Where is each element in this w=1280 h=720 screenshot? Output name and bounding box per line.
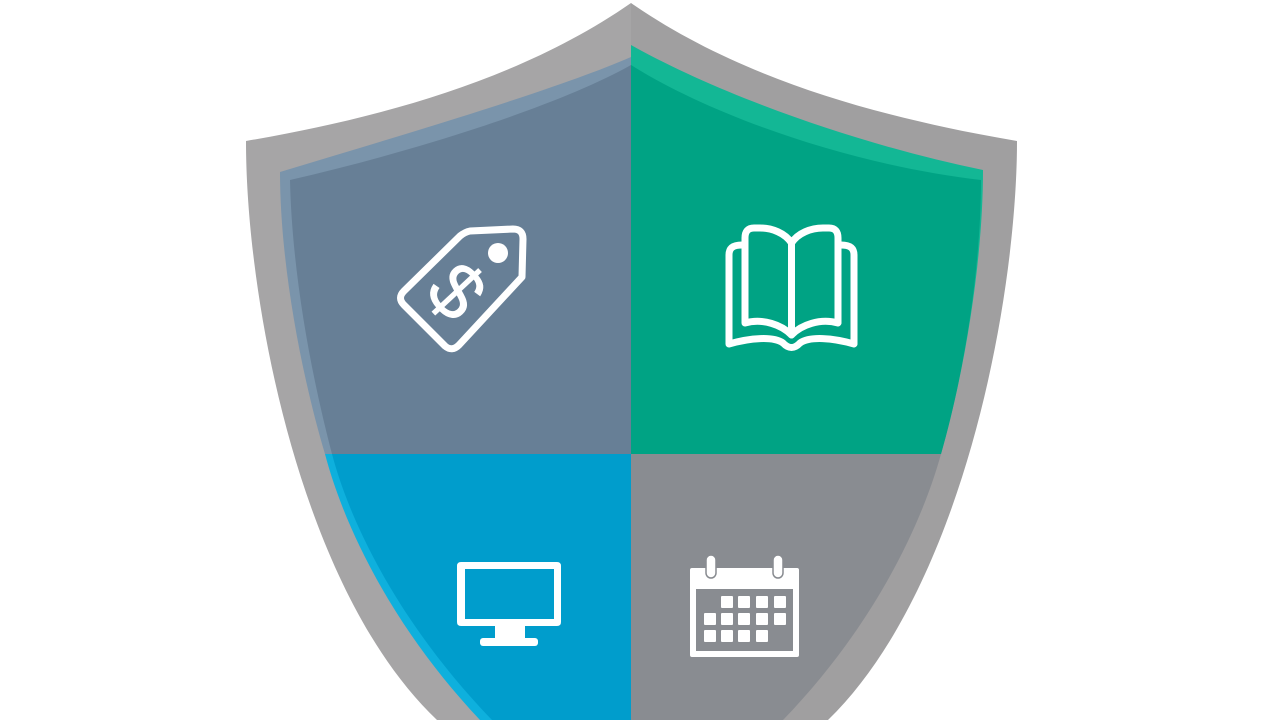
icon: price tag: [400, 229, 523, 349]
icon: calendar: [690, 555, 799, 657]
panel: schedule, grey quadrant: [631, 454, 941, 720]
frame: left half: [246, 3, 631, 720]
icon: computer monitor: [457, 562, 561, 646]
panel fill: [332, 454, 631, 720]
shield frame: [246, 3, 1017, 720]
panel highlight edge: [325, 454, 631, 720]
panel highlight edge: [631, 45, 983, 454]
panel highlight edge: [280, 57, 631, 454]
panel: reading, green quadrant: [631, 45, 983, 454]
panel: pricing, blue-grey quadrant: [280, 57, 631, 454]
panel: online, blue quadrant: [325, 454, 631, 720]
panel fill: [631, 65, 981, 454]
frame: right half: [631, 3, 1017, 720]
icon: open book: [729, 228, 854, 348]
panel fill: [290, 65, 631, 454]
panel fill: [631, 454, 941, 720]
icon: price tag: $: [410, 245, 504, 337]
